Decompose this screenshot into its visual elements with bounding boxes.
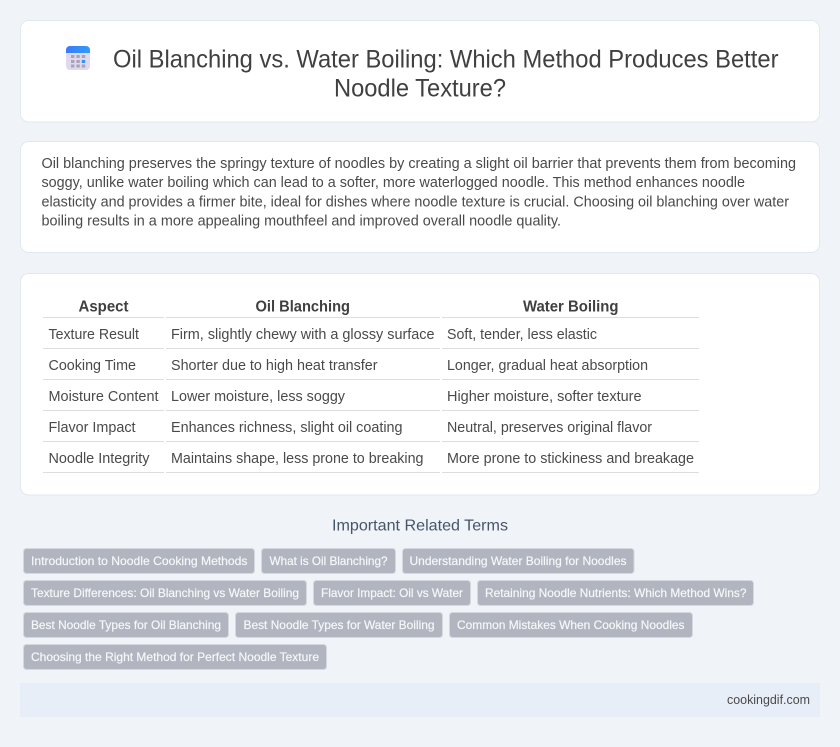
tag (236, 612, 442, 638)
tag: What is Oil Blanching? (270, 554, 388, 568)
row: flavor impact: Neutral, preserves original flavor (447, 420, 652, 436)
row: cooking time: Longer, gradual heat absorption (447, 358, 648, 374)
tag (402, 548, 634, 574)
text block: summary (42, 156, 796, 230)
row: cooking time (48, 358, 648, 374)
tag: Common Mistakes When Cooking Noodles (457, 618, 684, 632)
title (113, 46, 778, 103)
panel: comparison table (20, 274, 820, 495)
tag: Retaining Noodle Nutrients: Which Method Wins? (485, 586, 747, 600)
tag (24, 580, 306, 606)
tag: Texture Differences: Oil Blanching vs Water Boiling (31, 586, 299, 600)
panel: summary paragraph (20, 142, 820, 252)
row: noodle integrity: Maintains shape, less prone to breaking (171, 451, 424, 467)
heading: important related terms: Important Related Terms (332, 518, 508, 534)
text block: summary: elasticity and provides a firmer bite, ideal for dishes where noodle texture is crucial. Choosing oil blanching over water (42, 195, 789, 211)
title: Noodle Texture? (334, 75, 506, 103)
row: texture result: Firm, slightly chewy with a glossy surface (171, 327, 434, 343)
footer: cookingdif.com (727, 693, 810, 707)
row: noodle integrity: More prone to stickiness and breakage (447, 451, 694, 467)
table header: Aspect (78, 299, 129, 316)
tag (262, 548, 396, 574)
text block: summary: boiling results in a more appealing mouthfeel and improved overall noodle quality. (42, 214, 561, 230)
tag (314, 580, 470, 606)
row: cooking time: Shorter due to high heat transfer (171, 358, 378, 374)
tag (450, 612, 692, 638)
tag: Best Noodle Types for Oil Blanching (31, 618, 221, 632)
tag: Introduction to Noodle Cooking Methods (31, 554, 248, 568)
title: Oil Blanching vs. Water Boiling: Which Method Produces Better (113, 46, 778, 74)
row: noodle integrity (48, 451, 694, 467)
row: moisture content (48, 389, 642, 405)
row: flavor impact: Flavor Impact (48, 420, 136, 436)
row: flavor impact (48, 420, 652, 436)
tag: Best Noodle Types for Water Boiling (244, 618, 434, 632)
tag: Flavor Impact: Oil vs Water (321, 586, 463, 600)
footer (20, 683, 820, 717)
row: noodle integrity: Noodle Integrity (48, 451, 150, 467)
tag (24, 612, 228, 638)
tag (24, 548, 254, 574)
tag: Choosing the Right Method for Perfect Noodle Texture (31, 650, 319, 664)
row: texture result: Soft, tender, less elastic (447, 327, 597, 343)
text block: summary: soggy, unlike water boiling which can lead to a softer, more waterlogged noodle. This method enhances noodle (42, 175, 745, 191)
panel: title card (20, 20, 820, 122)
row: texture result: Texture Result (48, 327, 139, 343)
row: texture result (48, 327, 597, 343)
tag (478, 580, 754, 606)
icon: calendar (66, 46, 90, 70)
table header: Oil Blanching (256, 299, 350, 316)
table header: Water Boiling (523, 299, 618, 316)
row: cooking time: Cooking Time (48, 358, 136, 374)
table header (78, 299, 618, 316)
tag: Understanding Water Boiling for Noodles (410, 554, 626, 568)
related term tags (24, 548, 754, 670)
row: moisture content: Higher moisture, softer texture (447, 389, 642, 405)
row: moisture content: Moisture Content (48, 389, 158, 405)
tag (24, 644, 326, 670)
row: flavor impact: Enhances richness, slight oil coating (171, 420, 402, 436)
text block: summary: Oil blanching preserves the springy texture of noodles by creating a slight oil barrier that prevents them from becoming (42, 156, 796, 172)
row: moisture content: Lower moisture, less soggy (171, 389, 346, 405)
